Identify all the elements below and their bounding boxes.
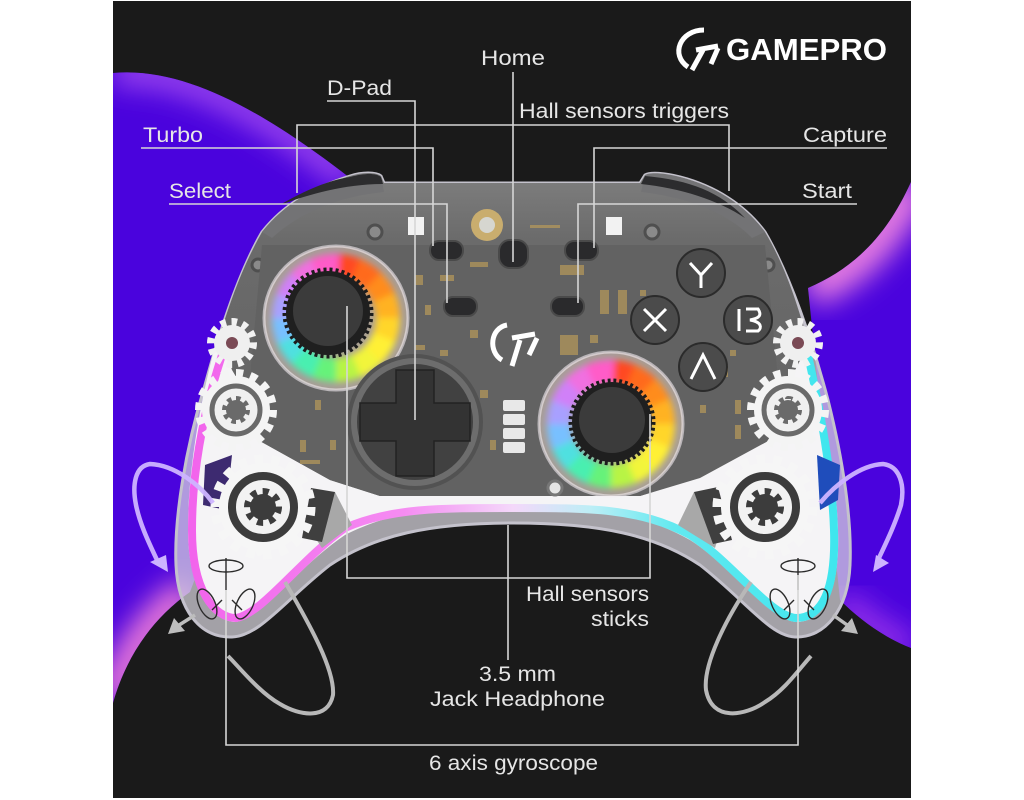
label: Hall sensors sticks: sticks [591, 608, 649, 631]
arrow: left orbit [228, 582, 333, 713]
brand logo: GAMEPRO [726, 32, 887, 67]
label: Capture: Capture [803, 124, 887, 147]
label: Turbo: Turbo [143, 124, 203, 147]
right stick [537, 350, 685, 498]
trigger mounts [252, 225, 774, 271]
label: D-Pad: D-Pad [327, 77, 392, 100]
centre logo [493, 325, 537, 366]
PCB gold contacts [300, 225, 741, 464]
screw bottom [548, 481, 562, 495]
gold screw [471, 209, 503, 241]
label: Hall sensors sticks: Hall sensors [526, 583, 649, 606]
label: Select: Select [169, 180, 231, 203]
face buttons [631, 249, 772, 391]
shoulder triggers [262, 173, 765, 238]
coloured inserts [203, 455, 840, 548]
indicator bars [503, 400, 525, 453]
background panel [113, 1, 911, 798]
label: 3.5 mm Jack Headphone [430, 663, 605, 711]
controller shell [176, 173, 850, 637]
PCB [248, 245, 780, 496]
menu buttons [430, 240, 598, 316]
label: Start: Start [802, 180, 852, 203]
gears right [718, 323, 824, 554]
left stick [262, 244, 410, 392]
brand logo [679, 30, 887, 70]
label: 3.5 mm Jack Headphone: Jack Headphone [430, 688, 605, 711]
arrow: right rotation [820, 464, 902, 572]
gyro icon right [766, 558, 832, 622]
label: Hall sensors sticks [526, 583, 649, 631]
label: 3.5 mm Jack Headphone: 3.5 mm [479, 663, 556, 686]
left purple wave [113, 72, 347, 703]
arrow: left tilt [168, 615, 195, 634]
arrow: right orbit [706, 582, 811, 713]
right purple wave [808, 182, 911, 648]
white grip interior [188, 335, 838, 622]
label: Hall sensors triggers: Hall sensors triggers [519, 100, 729, 123]
label: 6 axis gyroscope: 6 axis gyroscope [429, 752, 598, 775]
arrow: right tilt [833, 615, 858, 634]
upper translucent body [220, 175, 808, 496]
gears left [200, 323, 310, 554]
gyro icon left [193, 558, 259, 622]
arrow: left rotation [134, 464, 213, 572]
callout lines [141, 72, 887, 745]
d-pad [349, 356, 481, 488]
neon strip [192, 355, 834, 618]
LED right [606, 217, 622, 235]
LED left [408, 217, 424, 235]
controller [176, 173, 850, 637]
label: Home: Home [481, 47, 545, 70]
